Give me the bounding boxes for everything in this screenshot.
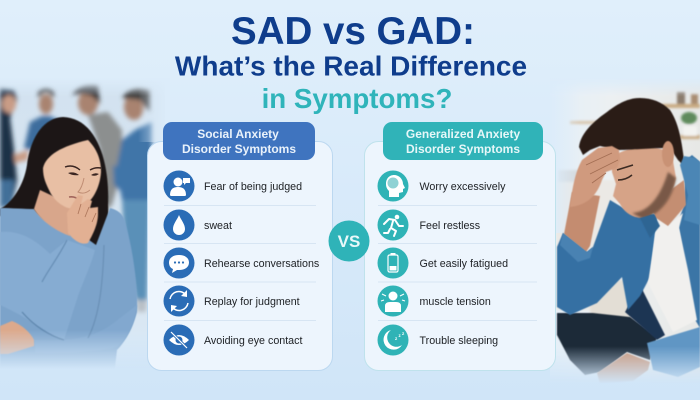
row: get easily fatigued: Get easily fatigued xyxy=(420,258,508,270)
panel heading: generalized anxiety xyxy=(383,122,543,160)
panel heading: generalized anxiety: Disorder Symptoms xyxy=(406,142,520,156)
panel heading: generalized anxiety: Generalized Anxiety xyxy=(406,127,520,141)
forearm xyxy=(564,192,600,252)
rolled cuff xyxy=(647,327,700,377)
hand on forehead xyxy=(570,146,620,207)
title: in Symptoms? xyxy=(262,83,452,114)
brow and eye xyxy=(617,165,633,180)
row: replay for judgment: Replay for judgment xyxy=(204,296,300,308)
hair xyxy=(579,98,685,167)
vs badge: VS xyxy=(338,232,360,251)
sweater arm highlight xyxy=(0,232,95,340)
hand at mouth xyxy=(67,195,98,244)
lower hand xyxy=(597,353,650,384)
row: worry excessively: Worry excessively xyxy=(420,181,506,193)
neck xyxy=(34,190,72,236)
blurred background people xyxy=(0,84,152,312)
denim shirt xyxy=(557,200,657,315)
panel heading: social anxiety: Disorder Symptoms xyxy=(182,142,296,156)
panel: generalized anxiety disorder symptoms xyxy=(364,122,556,370)
dark shirt shadow xyxy=(625,285,665,340)
jeans xyxy=(557,313,657,375)
panel heading: social anxiety: Social Anxiety xyxy=(197,127,279,141)
row: muscle tension xyxy=(378,286,491,316)
row: avoiding eye contact xyxy=(164,324,302,356)
row: rehearse conversations xyxy=(164,248,319,278)
sweater xyxy=(0,208,137,385)
eyes, brows and mouth xyxy=(65,166,101,200)
face xyxy=(612,147,676,218)
row: get easily fatigued xyxy=(378,248,508,278)
row: avoiding eye contact: Avoiding eye contact xyxy=(204,335,302,347)
title xyxy=(175,10,527,114)
photo: stressed man holding his forehead xyxy=(550,78,700,390)
row: fear of being judged: Fear of being judged xyxy=(204,181,302,193)
row: sweat: sweat xyxy=(204,220,232,232)
row: trouble sleeping: z xyxy=(402,331,405,336)
hair back xyxy=(0,116,109,246)
row: trouble sleeping: z xyxy=(395,336,398,341)
title: What’s the Real Difference xyxy=(175,50,527,82)
photo: anxious woman with blurred group behind her xyxy=(0,82,156,366)
blurred shelves and plant xyxy=(556,92,700,320)
white t-shirt xyxy=(648,213,697,332)
row: feel restless xyxy=(378,210,480,240)
row: trouble sleeping xyxy=(378,324,498,356)
row: fear of being judged xyxy=(164,170,302,202)
row: feel restless: Feel restless xyxy=(420,220,480,232)
ear xyxy=(662,141,674,167)
row: replay for judgment xyxy=(164,286,300,316)
panel heading: social anxiety xyxy=(163,122,315,160)
vs badge xyxy=(328,220,370,262)
row: trouble sleeping: z xyxy=(398,333,402,338)
row: trouble sleeping: Trouble sleeping xyxy=(420,335,498,347)
right side of shirt xyxy=(678,155,700,328)
face xyxy=(43,140,101,209)
title: SAD vs GAD: xyxy=(231,10,475,53)
row: rehearse conversations: Rehearse conversations xyxy=(204,258,319,270)
hand on arm xyxy=(0,321,34,354)
panel: social anxiety disorder symptoms xyxy=(148,122,332,370)
stubble xyxy=(632,172,676,219)
shirt cuff xyxy=(560,233,593,262)
photo fade beside the title xyxy=(138,78,170,142)
row: muscle tension: muscle tension xyxy=(420,296,491,308)
shirt collar xyxy=(680,156,700,225)
neck xyxy=(650,180,686,226)
row: worry excessively xyxy=(378,170,506,202)
row: sweat xyxy=(164,210,232,240)
